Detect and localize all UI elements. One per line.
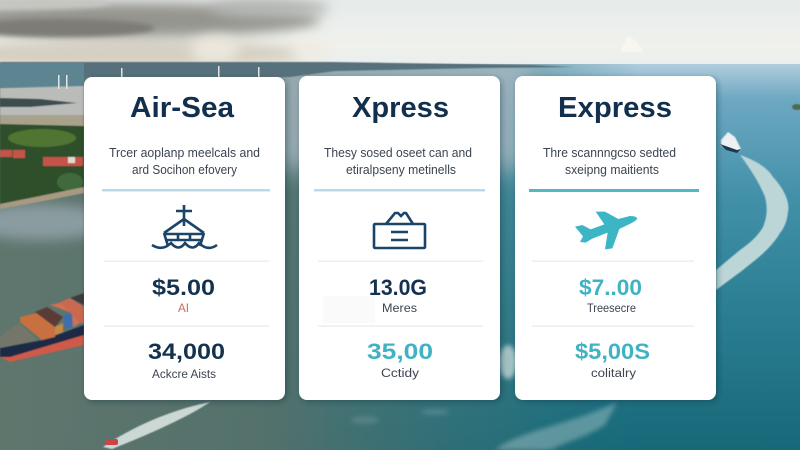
stat: $5.00: [152, 275, 215, 315]
stat: 34,000: 34,000: [148, 339, 225, 364]
stat: $5,00S: $5,00S: [575, 339, 650, 364]
speedboat and wake: [103, 402, 210, 449]
description: Xpress: Thesy sosed oseet can and: [324, 146, 472, 160]
panel: Express: [515, 76, 716, 400]
description: Air-Sea: [109, 146, 260, 177]
stat: 35,00: [367, 339, 433, 380]
stat: 34,000: Ackcre Aists: [152, 369, 216, 381]
stat: $5,00S: [575, 339, 650, 380]
stat: $5.00: $5.00: [152, 275, 215, 300]
icon: ship: [152, 205, 217, 248]
stat: $5,00S: colitalry: [591, 368, 636, 380]
description: Xpress: etiralpseny metinells: [346, 163, 456, 177]
stat: 13.0G: [369, 275, 427, 315]
heading: Xpress: Xpress: [352, 92, 449, 124]
shoreline with trees and red roofs: [0, 86, 84, 209]
foam patches: [351, 345, 617, 450]
panel: Xpress: [299, 76, 500, 400]
stat: $7..00: $7..00: [579, 275, 642, 300]
description: Air-Sea: ard Socihon efovery: [132, 163, 238, 177]
stat: $7..00: [579, 275, 642, 315]
stat: 13.0G: Meres: [382, 303, 417, 315]
stat: 35,00: 35,00: [367, 339, 433, 364]
soft water below the shore: [0, 204, 110, 240]
container ship: [0, 293, 84, 362]
description: Air-Sea: Trcer aoplanp meelcals and: [109, 146, 260, 160]
heading: Express: Express: [558, 92, 672, 124]
description: Express: Thre scannngcso sedted: [543, 146, 676, 160]
description: Xpress: [324, 146, 472, 177]
stat: 34,000: [148, 339, 225, 381]
icon: cargo box: [374, 213, 425, 248]
panel: Air-Sea: [84, 77, 285, 400]
stat: $7..00: Treesecre: [587, 303, 636, 315]
stat: 13.0G: 13.0G: [369, 275, 427, 300]
heading: Air-Sea: Air-Sea: [130, 92, 235, 124]
stat: $5.00: AI: [178, 303, 189, 315]
description: Express: [543, 146, 676, 177]
description: Express: sxeipng maitients: [565, 163, 659, 177]
cruise ship and wake: [716, 132, 788, 290]
icon: airplane: [575, 212, 637, 249]
stat: 35,00: Cctidy: [381, 368, 419, 380]
